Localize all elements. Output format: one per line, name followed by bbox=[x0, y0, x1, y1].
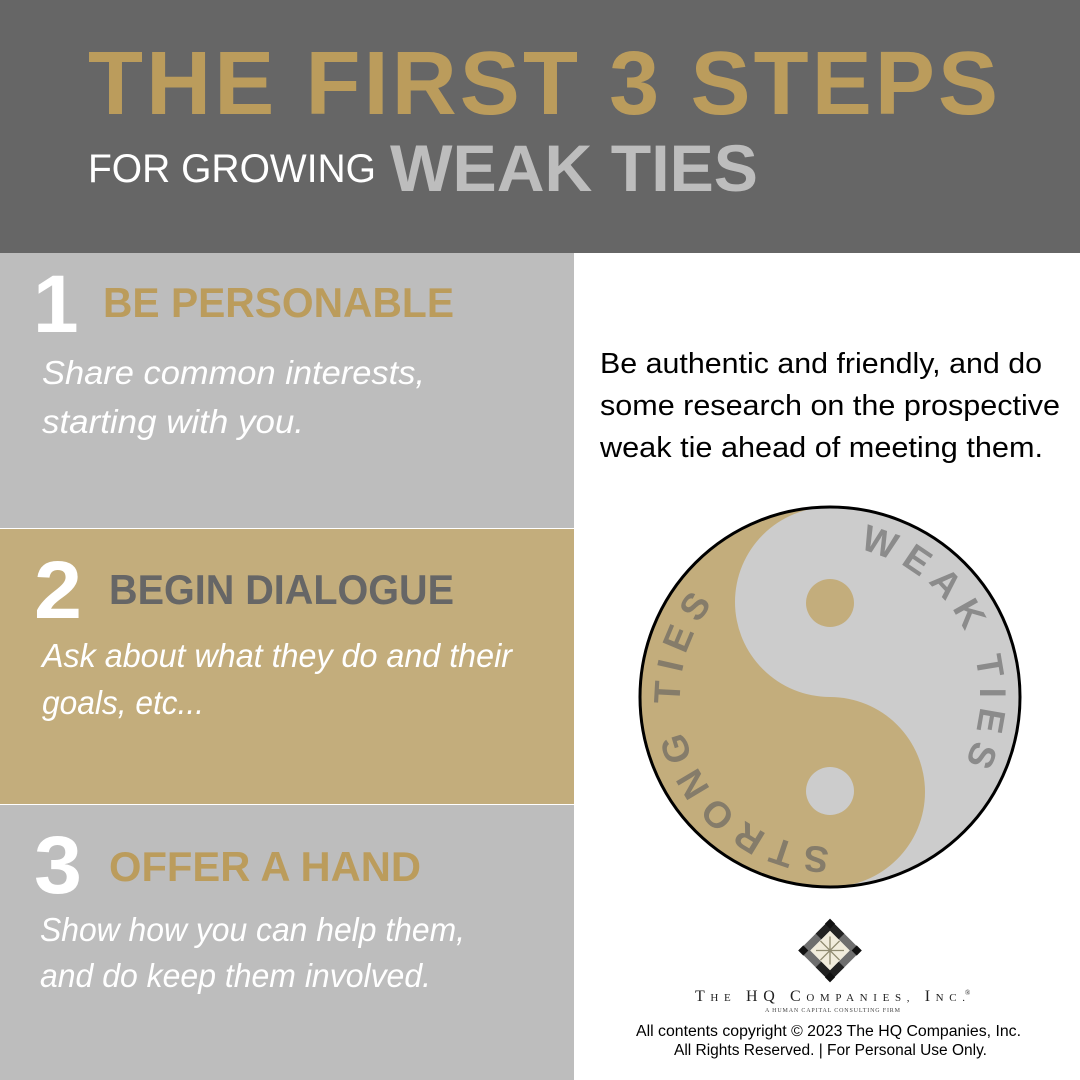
company logo bbox=[695, 919, 971, 1014]
header band bbox=[0, 0, 1080, 253]
copyright notice: All contents copyright © 2023 The HQ Companies, Inc. bbox=[636, 1023, 1021, 1040]
label: weak ties: WEAK TIES bbox=[866, 524, 1006, 768]
registered mark: ® bbox=[965, 989, 971, 997]
description text: some research on the prospective bbox=[600, 390, 1060, 422]
step 3 text: Show how you can help them, bbox=[40, 911, 465, 948]
step 1 text: starting with you. bbox=[42, 403, 304, 440]
step 1 text: Share common interests, bbox=[42, 354, 425, 391]
step number 1: 1 bbox=[33, 259, 79, 350]
step 2 heading: BEGIN DIALOGUE bbox=[109, 566, 454, 613]
icon: diamond mark bbox=[798, 919, 862, 982]
step 1 text bbox=[42, 354, 425, 440]
step 2 text: Ask about what they do and their bbox=[40, 637, 514, 674]
description text bbox=[599, 348, 1060, 464]
title: THE FIRST 3 STEPS bbox=[88, 34, 998, 134]
subtitle: FOR GROWING bbox=[88, 147, 376, 191]
step number 3: 3 bbox=[34, 820, 82, 911]
description text: Be authentic and friendly, and do bbox=[600, 348, 1042, 380]
panel: step 2 begin dialogue bbox=[0, 529, 574, 804]
step 3 heading: OFFER A HAND bbox=[109, 843, 421, 890]
step 2 text: goals, etc... bbox=[42, 684, 204, 721]
step 2 text bbox=[40, 637, 514, 721]
yin-yang diagram: strong ties and weak ties bbox=[638, 506, 1022, 888]
panel: step 1 be personable bbox=[0, 253, 574, 528]
step number 2: 2 bbox=[34, 545, 82, 636]
step 3 text bbox=[40, 911, 465, 994]
logo wordmark: T HE HQ C OMPANIES, I NC. bbox=[695, 988, 965, 1005]
panel: step 3 offer a hand bbox=[0, 805, 574, 1080]
step 3 text: and do keep them involved. bbox=[40, 957, 431, 994]
subtitle bbox=[88, 131, 758, 205]
copyright notice: All Rights Reserved. | For Personal Use Only. bbox=[674, 1042, 987, 1059]
description text: weak tie ahead of meeting them. bbox=[599, 432, 1043, 464]
label: strong ties: STRONG TIES bbox=[654, 593, 828, 872]
copyright notice bbox=[636, 1023, 1021, 1059]
subtitle: WEAK TIES bbox=[390, 131, 758, 205]
logo tagline: A HUMAN CAPITAL CONSULTING FIRM bbox=[765, 1008, 901, 1014]
step 1 heading: BE PERSONABLE bbox=[103, 279, 454, 326]
